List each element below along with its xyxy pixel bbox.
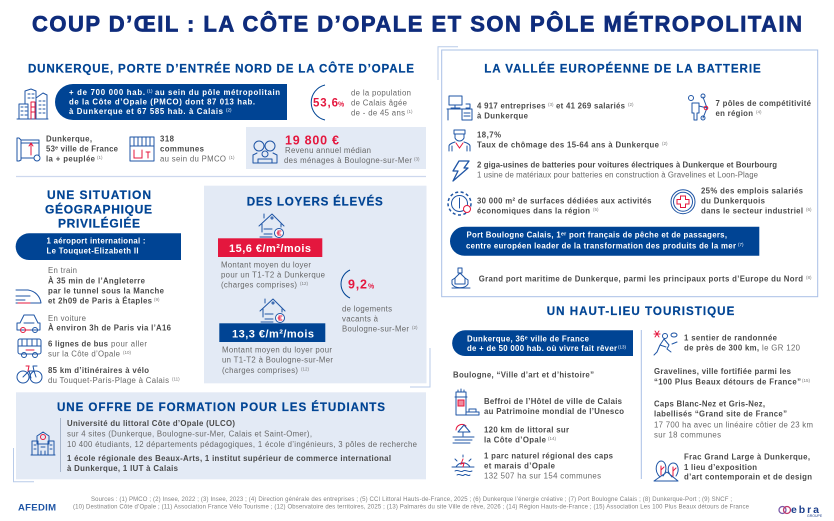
text: surfaces: économiques dans la région [477, 207, 590, 216]
divider [16, 176, 426, 178]
text: Dunkerque rank: (1) [97, 155, 103, 160]
stat: 53,6%: de la population [351, 88, 411, 97]
callout: airport [16, 233, 181, 260]
text: clusters: en région [716, 109, 753, 118]
icon: house red tag [259, 214, 284, 238]
sources: (10) Destination Côte d’Opale ; (11) Association France Vélo Tourisme ; (12) Observatoire des territoires, 2025 ; (13) Palmarès du site Ville de rêve, 2026 ; (14) Région Hauts-de-France ; (15) Association Les 100 Plus Beaux détours de France [73, 505, 750, 511]
icon: worker [449, 130, 470, 151]
text: Dunkerque rank [46, 135, 119, 164]
callout: Dunkerque rank: Dunkerque, 36ᵉ ville de France [467, 334, 590, 343]
text: trail: de près de 300 km, [684, 344, 759, 353]
text: formation: 10 400 étudiants, 12 départements pédagogiques, 1 école d’ingénieurs, 3 pôles de recherche [67, 440, 417, 449]
icon: red cross [671, 190, 695, 214]
panel: income [246, 127, 426, 169]
text: belfry [484, 397, 624, 416]
sources: Sources : (1) PMCO ; (2) Insee, 2022 ; (3) Insee, 2023 ; (4) Direction générale des entreprises ; (5) CCI Littoral Hauts-de-France, 2025 ; (6) Dunkerque l’énergie créative ; (7) Port Boulogne Calais ; (8) Dunkerque-Port ; (9) SNCF ; [91, 497, 732, 503]
callout: population: de la Côte d’Opale (PMCO) dont 87 013 hab. [69, 98, 255, 107]
text: bus: 6 lignes de bus [48, 340, 109, 349]
icon: house blue tag [260, 299, 285, 322]
icon: car [17, 315, 40, 332]
panel: situation [16, 188, 181, 385]
icon: city [17, 89, 48, 119]
text: train: par le tunnel sous la Manche [48, 287, 165, 296]
text: port Dunkerque: Grand port maritime de Dunkerque, parmi les principaux ports d’Europe du Nord [479, 274, 803, 283]
callout: port Boulogne: Port Boulogne Calais, 1ᵉʳ port français de pêche et de passagers, [466, 231, 727, 240]
text: rent Dunkerque: (12) [300, 281, 309, 286]
heading: Dunkerque: DUNKERQUE, PORTE D’ENTRÉE NORD DE LA CÔTE D’OPALE [28, 62, 414, 76]
rent Boulogne [219, 323, 325, 342]
text: industry jobs: du Dunkerquois [701, 197, 766, 206]
text: companies [477, 101, 634, 121]
text: rent Boulogne [222, 346, 333, 375]
stat: 9,2%: de logements [342, 305, 392, 314]
text: Frac: 1 lieu d’exposition [684, 463, 757, 472]
rent Dunkerque: 15,6 €/m²/mois [229, 243, 311, 255]
panel: income: Revenu annuel médian [285, 146, 371, 155]
title: COUP D’ŒIL : LA CÔTE D’OPALE ET SON PÔLE MÉTROPOLITAIN [32, 12, 802, 36]
text: train: et 2h09 de Paris à Étaples [48, 297, 153, 306]
text: coastline: la Côte d’Opale [484, 435, 547, 444]
text: train: À 35 min de l’Angleterre [48, 277, 146, 286]
callout: population: (2) [226, 108, 232, 112]
text: companies: (2) [628, 102, 634, 107]
text: car: En voiture [48, 314, 86, 323]
stat: 53,6%: de Calais âgée [351, 98, 407, 108]
panel: income: des ménages à Boulogne-sur-Mer [284, 156, 412, 165]
text: bus: sur la Côte d’Opale [48, 350, 120, 359]
heading: situation: PRIVILÉGIÉE [58, 215, 140, 230]
callout: port Boulogne: centre européen leader de la transformation des produits de la mer [466, 241, 736, 250]
text: coastline: 120 km de littoral sur [484, 425, 569, 434]
icon: desk [447, 96, 472, 120]
text: formation: 1 école régionale des Beaux-Arts, 1 institut supérieur de commerce international [67, 454, 391, 463]
icon: gear [448, 192, 471, 215]
stat: 9,2%: vacants à [342, 315, 379, 324]
stat: 9,2%: (2) [412, 325, 418, 330]
text: coastline [484, 425, 569, 444]
text: Caps: 17 700 ha avec un linéaire côtier de 23 km [654, 420, 813, 429]
stat: 53,6%: (1) [407, 109, 413, 114]
callout: port Boulogne: (7) [738, 242, 744, 247]
icon: school [31, 432, 55, 455]
text: car: À environ 3h de Paris via l’A16 [48, 323, 172, 332]
text: unemployment [477, 130, 668, 150]
text: formation [67, 419, 417, 473]
text: Caps: Caps Blanc-Nez et Gris-Nez, [654, 400, 765, 409]
text: industry jobs: 25% des emplois salariés [701, 186, 804, 195]
icon: beach [453, 424, 474, 443]
text: bus: (10) [123, 350, 132, 355]
icon: network [688, 94, 708, 120]
panel: batterie [442, 50, 818, 297]
text: gigafactories: 1 usine de matériaux pour batteries en construction à Gravelines et Loon-Plage [477, 171, 758, 180]
heading: formation: UNE OFFRE DE FORMATION POUR LES ÉTUDIANTS [57, 401, 385, 414]
text: Caps: labellisés “Grand site de France” [654, 410, 787, 419]
text: train: (9) [154, 297, 160, 302]
callout: population [55, 84, 287, 120]
text: communes: 318 [160, 135, 175, 144]
text: clusters: (4) [756, 110, 762, 114]
text: rent Boulogne: (12) [301, 366, 310, 372]
text: clusters [716, 99, 812, 118]
heading: tourisme: UN HAUT-LIEU TOURISTIQUE [547, 305, 735, 318]
icon: Frac trees [654, 461, 678, 481]
text: Boulogne: Boulogne, “Ville d’art et d’histoire” [453, 370, 594, 379]
heading: situation: GÉOGRAPHIQUE [45, 201, 152, 216]
text: companies: 4 917 entreprises [477, 101, 546, 110]
text: industry jobs [701, 186, 812, 216]
icon: sunset [452, 455, 474, 476]
text: natural park [484, 451, 614, 481]
text: surfaces: 30 000 m² de surfaces dédiées aux activités [477, 196, 652, 205]
text: bicycle: du Touquet-Paris-Plage à Calais [48, 376, 169, 385]
text: bicycle [48, 366, 180, 385]
heading: loyers: DES LOYERS ÉLEVÉS [247, 196, 383, 209]
text: industry jobs: dans le secteur industriel [701, 207, 803, 216]
text: Gravelines [654, 367, 811, 386]
heading: situation: UNE SITUATION [47, 188, 151, 202]
text: formation: sur 4 sites (Dunkerque, Boulogne-sur-Mer, Calais et Saint-Omer), [67, 430, 312, 439]
text: belfry: au Patrimoine mondial de l’Unesco [484, 407, 624, 416]
logo: Cebra: ebra [791, 504, 819, 516]
text: train [48, 266, 165, 306]
panel: income: 19 800 € [285, 133, 339, 147]
icon: map [17, 138, 40, 161]
text: companies: (3) [548, 102, 554, 107]
text: unemployment: Taux de chômage des 15-64 ans à Dunkerque [477, 141, 660, 150]
text: trail: le GR 120 [762, 344, 801, 353]
text: Caps: sur 18 communes [654, 430, 721, 439]
text: communes: au sein du PMCO [160, 155, 226, 164]
text: natural park: et marais d’Opale [484, 462, 556, 471]
text: Gravelines: “100 Plus Beaux détours de France” [654, 377, 801, 386]
text: natural park: 1 parc naturel régional des caps [484, 451, 614, 460]
text: rent Boulogne: (charges comprises) [222, 366, 298, 375]
corner accent [438, 47, 458, 80]
rent Boulogne: 13,3 €/m²/mois [232, 328, 314, 340]
text: trail [684, 334, 801, 353]
text: gigafactories [477, 161, 777, 180]
stat: 53,6%: % [338, 102, 345, 109]
text: surfaces [477, 196, 652, 216]
text: Frac: d’art contemporain et de design [684, 473, 812, 482]
callout: Dunkerque rank: de + de 50 000 hab. où vivre fait rêver [467, 344, 617, 353]
stat: 9,2%: % [368, 283, 375, 290]
text: car [48, 314, 172, 332]
icon: family [253, 141, 277, 163]
text: unemployment: 18,7% [477, 130, 501, 139]
stat: 9,2%: Boulogne-sur-Mer [342, 325, 409, 334]
heading: situation [45, 188, 152, 230]
callout: airport: 1 aéroport international : [46, 236, 146, 245]
text: companies: et 41 269 salariés [556, 101, 626, 110]
text: rent Dunkerque: Montant moyen du loyer [221, 261, 311, 270]
text: Frac: Frac Grand Large à Dunkerque, [684, 453, 810, 462]
text: Gravelines: Gravelines, ville fortifiée parmi les [654, 367, 792, 376]
corner accent [14, 448, 34, 482]
callout: population: au sein du pôle métropolitain [155, 88, 280, 97]
callout: Dunkerque rank [452, 330, 633, 356]
icon: belfry [455, 389, 479, 415]
callout: port Boulogne [450, 227, 759, 256]
text: belfry: Beffroi de l’Hôtel de ville de Calais [484, 397, 623, 406]
callout: population: (1) [147, 88, 153, 94]
text: unemployment: (2) [662, 141, 668, 146]
icon: bicycle [17, 366, 42, 383]
stat: 53,6% [311, 85, 413, 120]
text: bicycle: 85 km d’itinéraires à vélo [48, 366, 149, 375]
heading: batterie: LA VALLÉE EUROPÉENNE DE LA BATTERIE [484, 62, 761, 75]
panel: tourisme [452, 305, 813, 482]
text: Frac [684, 453, 812, 482]
stat: 9,2% [341, 270, 418, 334]
text: trail: 1 sentier de randonnée [684, 334, 778, 343]
text: rent Dunkerque [221, 261, 325, 290]
corner accent [410, 348, 430, 387]
icon: bus [18, 339, 41, 358]
text: Caps [654, 400, 813, 439]
text: rent Dunkerque: pour un T1-T2 à Dunkerque [221, 271, 325, 280]
text: Dunkerque rank: 53ᵉ ville de France [46, 145, 119, 154]
panel: Dunkerque [17, 62, 426, 169]
text: natural park: 132 507 ha sur 154 communes [484, 472, 601, 481]
text: surfaces: (5) [593, 207, 599, 212]
text: rent Dunkerque: (charges comprises) [221, 281, 297, 290]
text: bus [48, 340, 147, 359]
text: train: En train [48, 266, 77, 275]
text: communes: (1) [229, 155, 235, 160]
icon: shop [130, 137, 154, 161]
sources [73, 497, 750, 511]
text: coastline: (14) [548, 436, 557, 441]
stat: 53,6%: de - de 45 ans [351, 108, 405, 118]
callout: airport: Le Touquet-Elizabeth II [46, 247, 138, 256]
text: formation: à Dunkerque, 1 IUT à Calais [67, 464, 179, 473]
logo: Afedim: AFEDIM [18, 503, 56, 514]
rent Dunkerque [218, 238, 322, 257]
logo: Cebra: GROUPE [807, 514, 823, 518]
text: companies: à Dunkerque [477, 112, 529, 121]
icon: hiker [654, 331, 677, 355]
text: formation: Université du littoral Côte d’Opale (ULCO) [67, 419, 235, 428]
callout: population: à Dunkerque et 67 585 hab. à Calais [69, 107, 224, 116]
text: industry jobs: (6) [806, 207, 812, 212]
text: rent Boulogne: Montant moyen du loyer pour [222, 346, 332, 355]
text: gigafactories: 2 giga-usines de batteries pour voitures électriques à Dunkerque et Bourbourg [477, 161, 777, 170]
text: bicycle: (11) [172, 376, 180, 382]
text: Gravelines: (15) [802, 378, 811, 383]
text: clusters: 7 pôles de compétitivité [716, 99, 812, 108]
icon: ship [452, 268, 470, 288]
panel: loyers [204, 186, 426, 383]
stat: 53,6%: 53,6 [313, 98, 338, 110]
icon: lightning [453, 161, 469, 181]
text: bus: pour aller [111, 340, 147, 349]
text: Dunkerque rank: Dunkerque, [46, 135, 92, 144]
text: communes: communes [160, 145, 205, 154]
text: rent Boulogne: un T1-T2 à Boulogne-sur-Mer [222, 356, 333, 365]
logo: Cebra [779, 504, 823, 518]
text: port Dunkerque: (8) [806, 275, 812, 280]
icon: train [16, 290, 41, 303]
callout: Dunkerque rank: (13) [618, 344, 627, 350]
panel: formation [16, 392, 426, 479]
stat: 9,2%: 9,2 [348, 277, 367, 291]
panel: income: (3) [414, 156, 420, 162]
text: communes [160, 135, 235, 164]
callout: population: + de 700 000 hab. [69, 88, 145, 97]
text: Dunkerque rank: la + peuplée [46, 155, 96, 164]
